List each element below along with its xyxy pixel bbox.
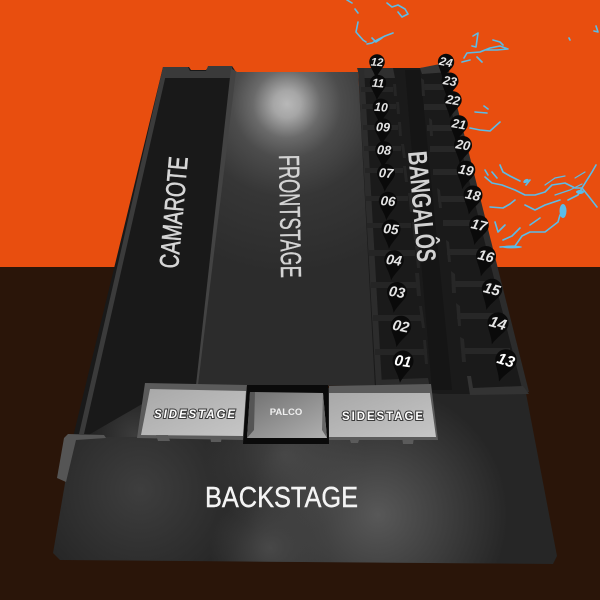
pin 03: 03 (388, 284, 406, 302)
pin 10 (371, 98, 390, 125)
pin 20 (451, 135, 473, 165)
river thick spots (502, 178, 584, 248)
pin 12 (368, 54, 385, 79)
pin 19: 19 (457, 161, 475, 179)
pin 08: 08 (376, 142, 393, 158)
panel: backstage (53, 388, 557, 564)
pin 21: 21 (450, 115, 467, 133)
map pins: bangalos 13 to 24 (434, 52, 520, 385)
label: bangalos: BANGALÔS (402, 150, 443, 263)
label: palco: PALCO (270, 407, 302, 418)
panel: right sidestage (329, 384, 438, 444)
pin 03 (384, 281, 408, 314)
pin 16 (471, 244, 498, 279)
pin 15 (476, 276, 505, 313)
rivers map (347, 0, 598, 247)
panel: camarote (73, 66, 237, 437)
panel: bangalos (357, 64, 529, 395)
pin 05: 05 (383, 221, 400, 238)
pin 04: 04 (385, 252, 403, 270)
background: dark brown ground (0, 267, 600, 600)
pin 18: 18 (464, 186, 482, 204)
pin 13 (489, 346, 520, 385)
pin 07: 07 (378, 165, 395, 181)
pin 11 (369, 74, 387, 101)
pin 10: 10 (374, 100, 388, 115)
pin 07 (376, 163, 396, 192)
pin 02: 02 (391, 317, 411, 337)
pin 06: 06 (380, 193, 397, 209)
pin 21 (447, 114, 469, 144)
pin 13: 13 (495, 350, 517, 372)
pin 14 (482, 310, 511, 347)
pin 23: 23 (441, 73, 458, 89)
pin 06 (377, 191, 398, 221)
pin 15: 15 (482, 279, 503, 300)
label: camarote: CAMAROTE (154, 155, 194, 270)
pin 19 (453, 159, 477, 191)
pin 09: 09 (376, 120, 390, 135)
label: left sidestage: SIDESTAGE (154, 409, 235, 421)
label: frontstage: FRONTSTAGE (272, 155, 306, 278)
pin 04 (381, 249, 405, 282)
label: right sidestage: SIDESTAGE (342, 411, 423, 423)
pin 20: 20 (454, 136, 472, 154)
pin 09 (373, 118, 392, 146)
pin 12: 12 (370, 56, 384, 69)
pin 16: 16 (476, 247, 496, 267)
pin 11: 11 (371, 76, 385, 91)
pin 18 (460, 184, 484, 216)
pin 22 (441, 90, 463, 120)
pin 17 (465, 213, 491, 247)
label: backstage: BACKSTAGE (205, 482, 358, 514)
corner tab (57, 434, 106, 482)
map pins: bangalos 01 to 12 (368, 54, 415, 384)
background: orange sky (0, 0, 600, 267)
pin 17: 17 (469, 216, 489, 236)
panel: palco (243, 385, 329, 444)
panel: left sidestage (137, 383, 247, 442)
panel: frontstage (198, 72, 379, 386)
pin 01: 01 (393, 352, 412, 371)
pin 24 (434, 52, 456, 81)
pin 08 (374, 141, 393, 169)
pin 01 (390, 349, 415, 384)
pin 24: 24 (437, 54, 454, 70)
left row of bungalows (357, 68, 430, 388)
pin 02 (386, 314, 413, 349)
pin 05 (379, 219, 401, 250)
pin 22: 22 (444, 92, 461, 108)
pin 14: 14 (487, 313, 509, 334)
right row of bungalows (420, 64, 529, 395)
pin 23 (439, 71, 460, 100)
